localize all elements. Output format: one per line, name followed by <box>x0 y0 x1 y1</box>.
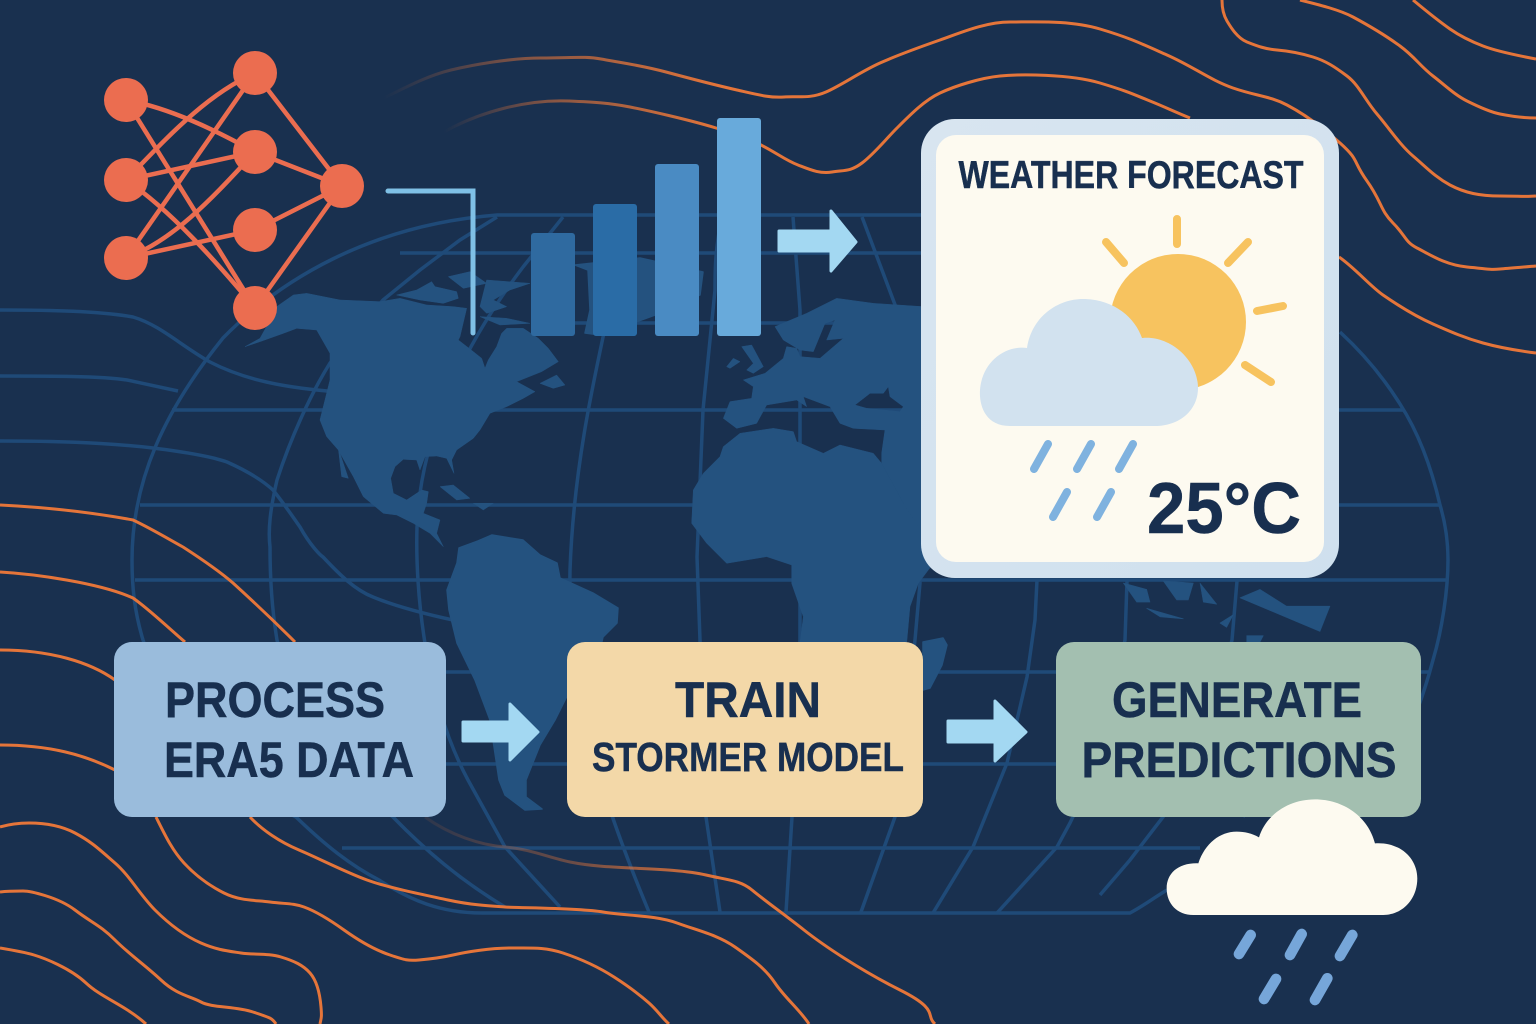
step: train stormer model: STORMER MODEL <box>592 734 904 780</box>
continent: Eurasia <box>692 298 933 643</box>
icon: sun <box>1106 219 1283 390</box>
continent: Greenland <box>575 258 703 335</box>
continent: South America <box>447 535 618 810</box>
forecast card <box>921 119 1339 578</box>
icon: rain <box>1034 444 1133 517</box>
arrow: chart to forecast <box>779 211 856 271</box>
step: generate predictions <box>1056 642 1421 817</box>
world map <box>245 258 1330 810</box>
icon: cloud <box>980 299 1198 426</box>
heading: weather forecast: WEATHER FORECAST <box>958 154 1304 197</box>
continent: North America <box>245 272 565 547</box>
islands: Southeast Asia <box>1123 581 1330 642</box>
neural network icon <box>104 51 364 330</box>
arrow: train to generate <box>948 701 1026 761</box>
step: generate predictions: PREDICTIONS <box>1082 732 1396 788</box>
arrow: process to train <box>463 704 538 760</box>
temperature: 25°C <box>1147 469 1301 549</box>
step: train stormer model <box>567 642 923 817</box>
chart axis bracket <box>388 191 473 333</box>
continent: Africa <box>692 428 933 643</box>
bar chart <box>531 118 761 336</box>
step: train stormer model: TRAIN <box>675 672 821 728</box>
step: process ERA5 data: PROCESS <box>165 672 385 728</box>
globe grid <box>0 215 1448 913</box>
step: process ERA5 data: ERA5 DATA <box>164 732 414 788</box>
step: generate predictions: GENERATE <box>1112 672 1362 728</box>
icon: rain cloud <box>1167 799 1417 1000</box>
continent: Africa south and Madagascar <box>923 638 947 690</box>
step: process ERA5 data <box>114 642 446 817</box>
